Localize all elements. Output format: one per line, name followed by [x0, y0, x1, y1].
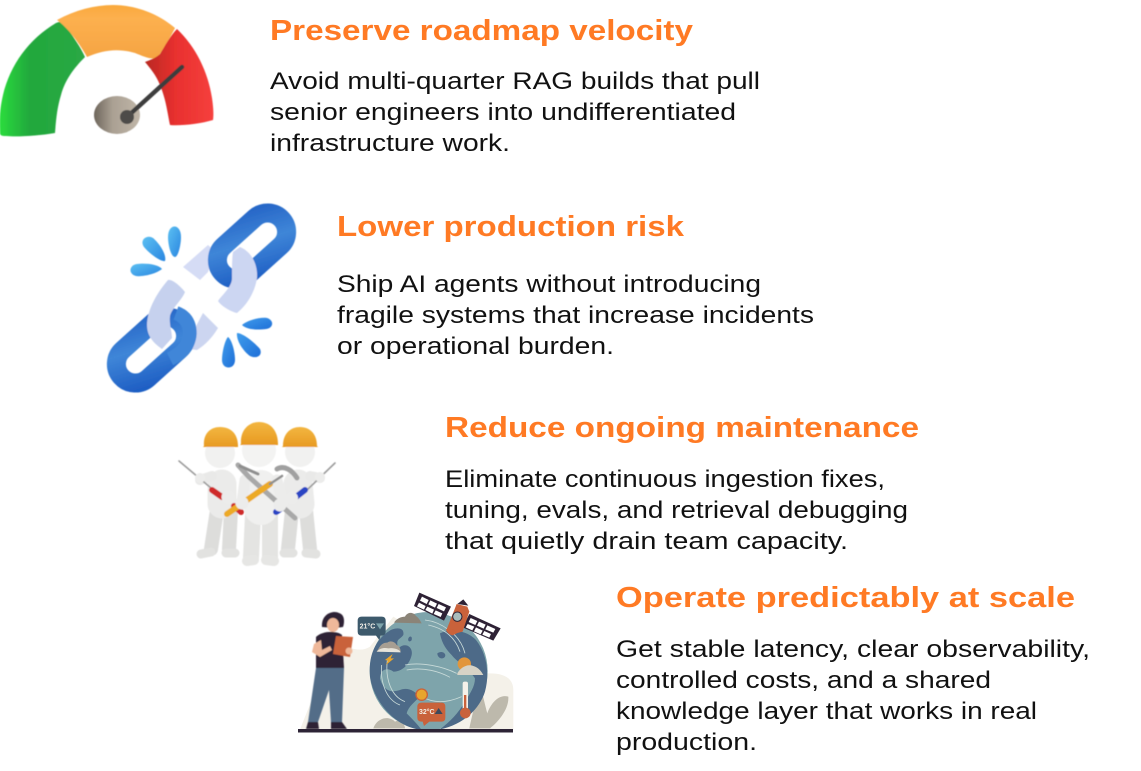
text block: lower production risk — [337, 271, 814, 360]
panel: reduce ongoing maintenance — [179, 412, 919, 561]
text block: lower production risk: fragile systems that increase incidents — [337, 302, 814, 329]
heading: reduce ongoing maintenance: Reduce ongoing maintenance — [445, 412, 919, 444]
text block: reduce ongoing maintenance: tuning, evals, and retrieval debugging — [445, 497, 908, 524]
text block: reduce ongoing maintenance: that quietly drain team capacity. — [445, 528, 848, 555]
heading: lower production risk: Lower production risk — [337, 211, 685, 243]
ground line — [298, 729, 513, 732]
icon: gauge — [0, 5, 213, 136]
text block: operate predictably at scale: production. — [616, 729, 757, 756]
icon: three workers with tools — [179, 422, 335, 561]
icon: person with globe and satellite — [300, 593, 513, 730]
text block: operate predictably at scale: Get stable latency, clear observability, — [616, 636, 1090, 663]
icon: broken chain link — [109, 205, 294, 391]
callout: 21 degrees — [358, 617, 386, 640]
text block: operate predictably at scale: knowledge layer that works in real — [616, 698, 1037, 725]
text block: lower production risk: Ship AI agents without introducing — [337, 271, 761, 298]
text block: preserve roadmap velocity: Avoid multi-quarter RAG builds that pull — [270, 68, 760, 95]
text block: operate predictably at scale — [616, 636, 1090, 756]
panel: preserve roadmap velocity — [0, 5, 760, 157]
text block: preserve roadmap velocity — [270, 68, 760, 157]
callout: 32 degrees: 32°C — [419, 708, 435, 716]
text block: preserve roadmap velocity: infrastructure work. — [270, 130, 510, 157]
text block: operate predictably at scale: controlled costs, and a shared — [616, 667, 991, 694]
callout: 32 degrees — [417, 703, 445, 726]
text block: reduce ongoing maintenance: Eliminate continuous ingestion fixes, — [445, 466, 885, 493]
text block: reduce ongoing maintenance — [445, 466, 908, 555]
text block: preserve roadmap velocity: senior engineers into undifferentiated — [270, 99, 736, 126]
callout: 21 degrees: 21°C — [360, 622, 375, 630]
icon: person with clipboard — [306, 612, 353, 729]
text block: lower production risk: or operational burden. — [337, 333, 614, 360]
heading: preserve roadmap velocity: Preserve roadmap velocity — [270, 15, 693, 47]
panel: operate predictably at scale — [298, 582, 1090, 756]
heading: operate predictably at scale: Operate predictably at scale — [616, 582, 1075, 614]
panel: lower production risk — [109, 205, 814, 391]
